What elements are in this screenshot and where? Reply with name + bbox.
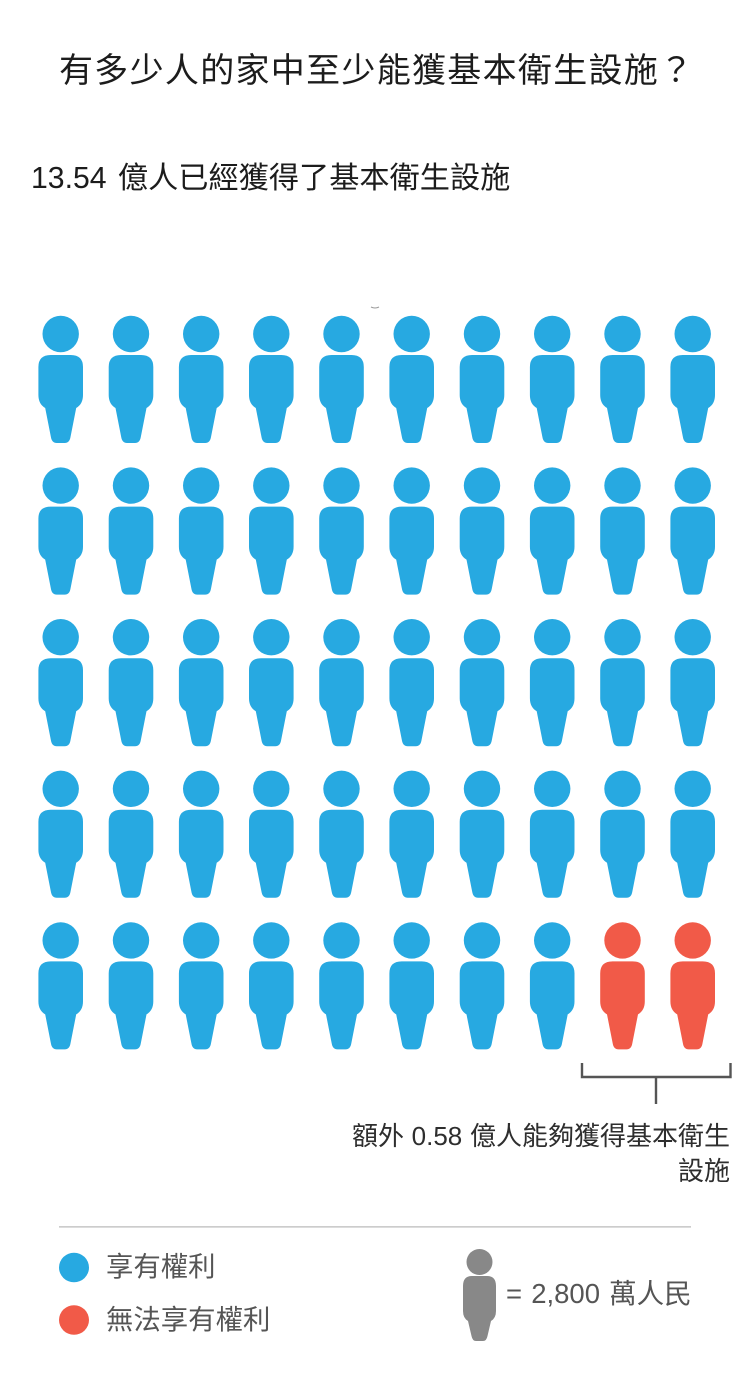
legend divider (59, 1226, 691, 1228)
row 3 of people (38, 619, 715, 746)
row 4 of people (38, 771, 715, 898)
callout text (352, 1121, 730, 1186)
title: 有多少人的家中至少能獲基本衛生設施？ (59, 52, 694, 90)
legend unit label: = 2,800 萬人民 (506, 1278, 692, 1309)
callout text: 額外 0.58 億人能夠獲得基本衛生 (352, 1121, 730, 1151)
legend person icon (463, 1249, 496, 1341)
row 2 of people (38, 467, 715, 595)
row 5 of people: red (600, 922, 715, 1049)
legend dot: blue (59, 1253, 89, 1282)
legend dot: red (59, 1305, 89, 1335)
row 1 of people (38, 316, 715, 443)
bracket (582, 1063, 730, 1104)
row 5 of people: blue (38, 922, 574, 1049)
subtitle: 13.54 億人已經獲得了基本衛生設施 (31, 162, 510, 195)
callout text: 設施 (678, 1156, 730, 1186)
legend label: has rights: 享有權利 (106, 1251, 216, 1282)
legend label: no rights: 無法享有權利 (106, 1304, 270, 1335)
